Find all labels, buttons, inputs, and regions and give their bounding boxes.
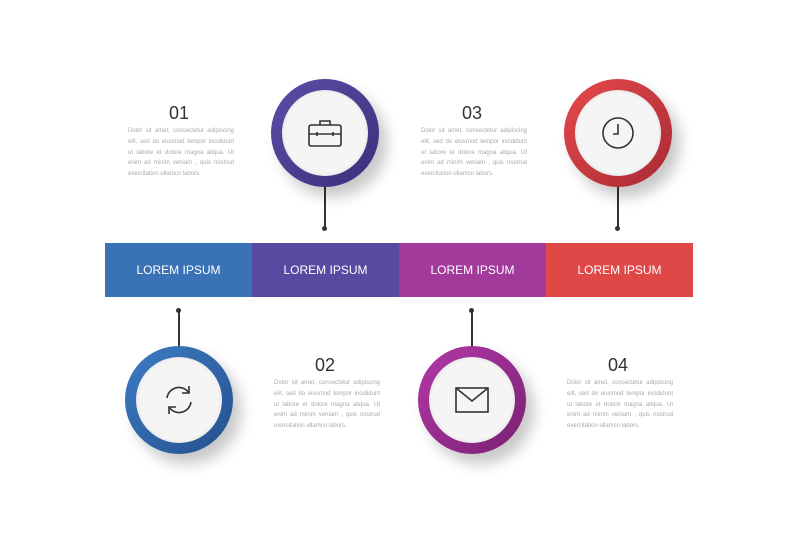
step 03 text: Dolor sit amet, consectetur adipiscing elit, sed do eiusmod tempor incididunt ut labore et dolore magna aliqua. Ut enim ad minim veniam , quis nostrud exercitation ullamco labors. xyxy=(421,128,527,177)
connector 2 xyxy=(322,186,327,231)
segment 4 xyxy=(546,243,693,297)
step 03 text: 03 xyxy=(462,103,482,123)
step 04 text xyxy=(567,355,673,429)
segment 4: LOREM IPSUM xyxy=(577,263,662,277)
connector 4 xyxy=(615,186,620,231)
segment 2 xyxy=(252,243,399,297)
connector 3 xyxy=(469,308,474,346)
segment 2: LOREM IPSUM xyxy=(283,263,368,277)
segment 3 xyxy=(399,243,546,297)
step 01 text: Dolor sit amet, consectetur adipiscing elit, sed do eiusmod tempor incididunt ut labore et dolore magna aliqua. Ut enim ad minim veniam , quis nostrud exercitation ullamco labors. xyxy=(128,128,234,177)
step 04 text: 04 xyxy=(608,355,628,375)
segment 1: LOREM IPSUM xyxy=(136,263,220,277)
icon: clock xyxy=(602,117,634,149)
icon: refresh xyxy=(166,386,192,414)
icon: briefcase xyxy=(308,120,342,147)
step 02 text xyxy=(274,355,380,429)
step 01 text: 01 xyxy=(169,103,189,123)
segment 3: LOREM IPSUM xyxy=(430,263,514,277)
connector 1 xyxy=(176,308,181,346)
circle: mail xyxy=(418,346,526,454)
circle: briefcase xyxy=(271,79,379,187)
segment 1 xyxy=(105,243,252,297)
circle: clock xyxy=(564,79,672,187)
step 02 text: Dolor sit amet, consectetur adipiscing elit, sed do eiusmod tempor incididunt ut labore et dolore magna aliqua. Ut enim ad minim veniam , quis nostrud exercitation ullamco labors. xyxy=(274,380,380,429)
step 02 text: 02 xyxy=(315,355,335,375)
icon: mail xyxy=(455,387,489,413)
step 04 text: Dolor sit amet, consectetur adipiscing elit, sed do eiusmod tempor incididunt ut labore et dolore magna aliqua. Ut enim ad minim veniam , quis nostrud exercitation ullamco labors. xyxy=(567,380,673,429)
circle: refresh xyxy=(125,346,233,454)
step 03 text xyxy=(421,103,527,177)
timeline bar xyxy=(105,243,693,297)
step 01 text xyxy=(128,103,234,177)
